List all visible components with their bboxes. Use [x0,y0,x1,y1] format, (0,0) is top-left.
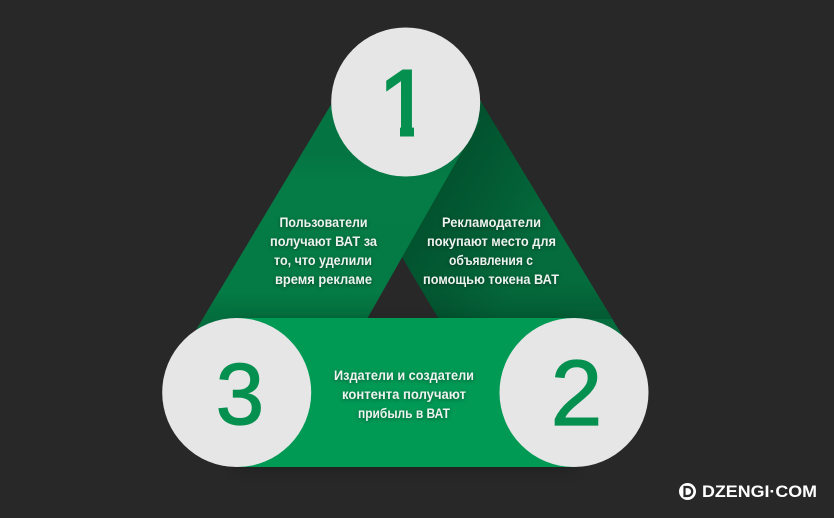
icon: logo mark [679,483,696,500]
circle 2 [500,318,648,467]
text: users: получают ВАТ за [270,234,377,249]
text: advertisers: помощью токена ВАТ [423,272,560,287]
circle 1 [331,28,480,176]
text: users [270,215,377,287]
panel: bottom band [236,318,574,467]
text: publishers [334,368,474,421]
number 2: 2 [551,341,602,445]
text: users: то, что уделили [274,253,372,268]
text: advertisers: покупают место для [427,234,556,249]
logo: dzengi.com [679,483,817,501]
text: publishers: контента получают [342,387,466,402]
number 3: 3 [216,346,264,443]
circle 3 [162,318,311,467]
text: users: Пользователи [280,215,368,230]
text: advertisers: Рекламодатели [442,215,541,230]
text: users: время рекламе [275,272,372,287]
text: advertisers [423,215,560,287]
panel: left band [190,100,480,340]
text: advertisers: объявления с [449,253,533,268]
logo wordmark: DZENGI·COM [702,483,817,501]
panel: right band [402,100,625,392]
text: publishers: Издатели и создатели [334,368,474,383]
text: publishers: прибыль в ВАТ [358,406,451,421]
number 1: 1 [378,51,431,157]
